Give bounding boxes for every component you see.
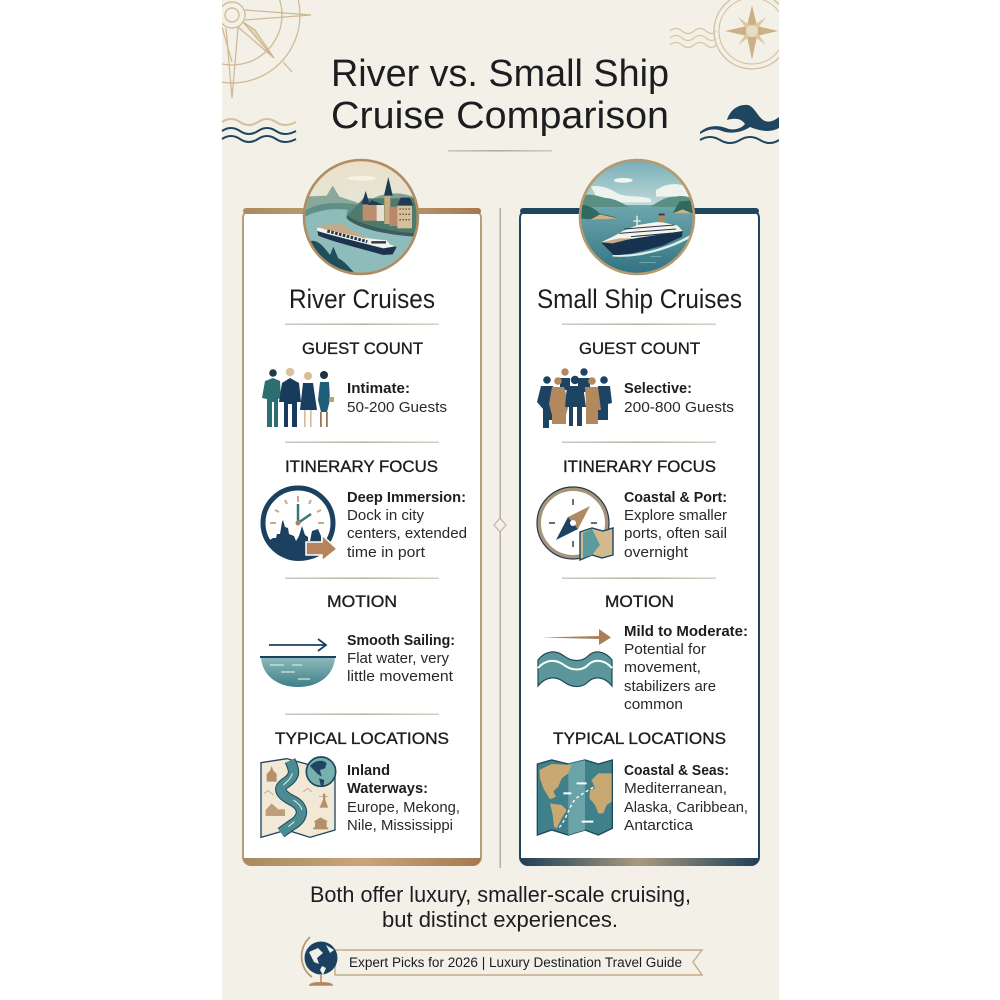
section: typical locations: Alaska, Caribbean, (624, 800, 748, 816)
icon: globe (302, 937, 338, 985)
panel: small ship cruises (520, 155, 759, 866)
rule (285, 714, 439, 715)
bottom bar (243, 858, 481, 866)
decoration: compass top left (222, 0, 311, 98)
icon: four guests (262, 368, 334, 427)
icon: world map (537, 760, 612, 835)
panel: river cruises (243, 155, 481, 866)
section: typical locations (537, 729, 748, 835)
section: itinerary focus: centers, extended (347, 526, 467, 542)
section: guest count: GUEST COUNT (579, 339, 700, 358)
title: Cruise Comparison (331, 95, 669, 137)
closing statement (310, 882, 691, 932)
section: motion: common (624, 697, 683, 713)
center divider (494, 208, 506, 868)
icon: compass and map (537, 487, 613, 560)
icon: river map (261, 757, 336, 837)
section: motion: Mild to Moderate: (624, 624, 748, 640)
section: typical locations: Nile, Mississippi (347, 818, 453, 834)
section: itinerary focus: overnight (624, 545, 688, 561)
section: itinerary focus: Explore smaller (624, 508, 727, 524)
closing statement: but distinct experiences. (382, 907, 618, 932)
illustration: river town (305, 161, 417, 273)
heading: River Cruises (289, 284, 435, 314)
icon: waves with arrow (538, 629, 612, 686)
section: itinerary focus: Coastal & Port: (624, 490, 727, 506)
section: itinerary focus: Deep Immersion: (347, 490, 466, 506)
section: typical locations: Waterways: (347, 781, 428, 797)
footer ribbon (335, 950, 702, 975)
section: typical locations: Inland (347, 763, 390, 779)
section: itinerary focus: time in port (347, 545, 425, 561)
decoration: waves top right (670, 28, 716, 48)
illustration: small ship at sea (581, 161, 693, 273)
section: motion: MOTION (327, 592, 397, 611)
section: typical locations: Mediterranean, (624, 781, 727, 797)
icon: group of guests (537, 368, 612, 428)
title (331, 53, 669, 137)
section: itinerary focus: Dock in city (347, 508, 425, 524)
section: guest count: Selective: (624, 381, 692, 397)
section: motion: movement, (624, 660, 701, 676)
footer ribbon: Expert Picks for 2026 | Luxury Destination Travel Guide (349, 955, 682, 970)
top bar (243, 208, 481, 214)
section: guest count (262, 339, 447, 427)
bottom bar (520, 858, 759, 866)
section: itinerary focus: ITINERARY FOCUS (285, 457, 438, 476)
section: motion: little movement (347, 669, 453, 685)
rule (285, 578, 439, 579)
rule (562, 442, 716, 443)
section: motion (538, 592, 748, 713)
section: typical locations: TYPICAL LOCATIONS (275, 729, 449, 748)
section: motion: Smooth Sailing: (347, 633, 455, 649)
heading: Small Ship Cruises (537, 284, 742, 314)
rule (562, 578, 716, 579)
top bar (520, 208, 759, 214)
decoration: wave crest right (700, 105, 779, 143)
section: motion (260, 592, 455, 687)
section: typical locations (261, 729, 460, 837)
section: itinerary focus: ITINERARY FOCUS (563, 457, 716, 476)
section: guest count: 200-800 Guests (624, 400, 734, 416)
section: typical locations: TYPICAL LOCATIONS (553, 729, 726, 748)
title: River vs. Small Ship (331, 53, 669, 95)
section: guest count: 50-200 Guests (347, 400, 447, 416)
section: motion: stabilizers are (624, 679, 716, 695)
rule (562, 324, 716, 325)
section: typical locations: Coastal & Seas: (624, 763, 729, 779)
page background (222, 0, 779, 1000)
closing statement: Both offer luxury, smaller-scale cruising, (310, 882, 691, 907)
section: motion: Potential for (624, 642, 706, 658)
section: guest count: Intimate: (347, 381, 410, 397)
section: motion: Flat water, very (347, 651, 450, 667)
decoration: waves left (222, 119, 296, 142)
section: itinerary focus (537, 457, 727, 561)
rule (285, 324, 439, 325)
title divider (448, 150, 552, 152)
section: typical locations: Antarctica (624, 818, 694, 834)
section: itinerary focus (263, 457, 467, 561)
icon: clock and skyline (263, 488, 337, 561)
decoration: compass top right (713, 0, 779, 70)
section: typical locations: Europe, Mekong, (347, 800, 460, 816)
section: motion: MOTION (605, 592, 674, 611)
section: guest count (537, 339, 734, 428)
rule (285, 442, 439, 443)
section: itinerary focus: ports, often sail (624, 526, 727, 542)
section: guest count: GUEST COUNT (302, 339, 423, 358)
icon: flat water (260, 639, 336, 687)
